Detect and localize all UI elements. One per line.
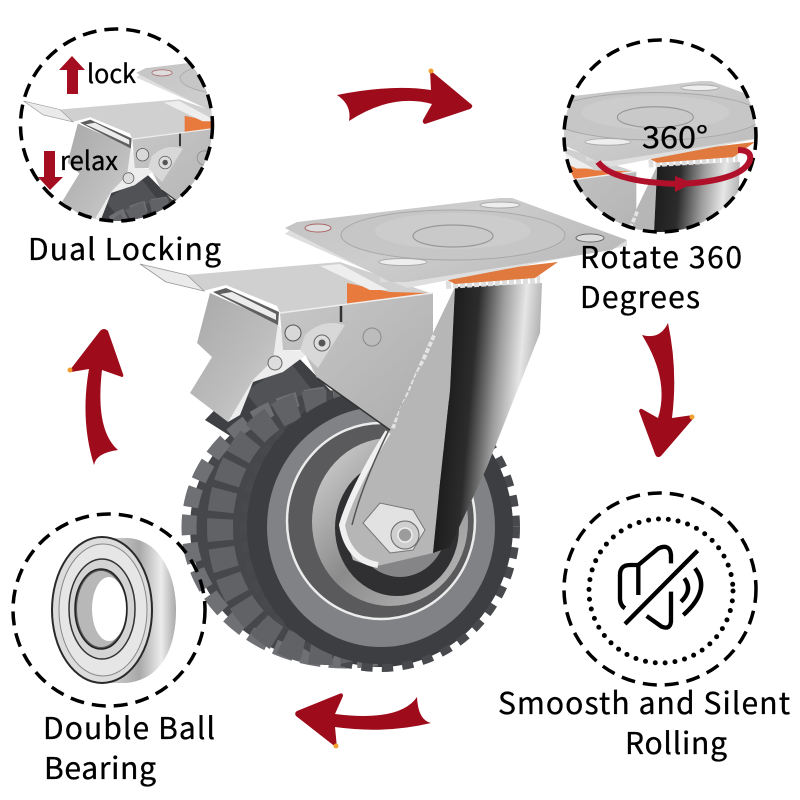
- fork: [340, 283, 542, 567]
- panel: double ball bearing: Bearing: [44, 744, 156, 788]
- zoomed lock detail: [24, 63, 212, 221]
- icon: muted speaker: [620, 547, 701, 628]
- tire: [189, 352, 513, 667]
- arrow: bottom, silent to bearing: [295, 693, 431, 748]
- arrow: right, rotate to silent: [639, 323, 694, 457]
- brake pedal: [190, 288, 310, 422]
- panel: double ball bearing: [13, 514, 215, 788]
- zoomed swivel detail: [564, 81, 756, 232]
- panel: silent rolling: [498, 493, 790, 763]
- lock label: lock: [87, 54, 137, 91]
- heading: Rotate 360: [580, 233, 742, 277]
- weld seam: [392, 335, 433, 428]
- axle nut: [363, 503, 425, 553]
- arrow: top, lock to rotate: [337, 68, 472, 124]
- icon: lock arrow: [59, 56, 85, 94]
- swivel top plate: [285, 198, 627, 288]
- icon: bearing: [52, 537, 176, 683]
- wheel face: [247, 390, 513, 664]
- brake bracket: [140, 262, 433, 430]
- heading: Smoosth and Silent: [498, 679, 790, 723]
- icon: rotation arrow: [598, 150, 750, 192]
- arrow: left, bearing to lock: [68, 329, 123, 465]
- relax label: relax: [60, 141, 118, 178]
- panel: silent rolling: Rolling: [625, 719, 727, 763]
- panel: rotate 360: [562, 38, 758, 316]
- 360 label: 360°: [642, 113, 708, 157]
- heading: Double Ball: [43, 704, 215, 748]
- heading: Dual Locking: [28, 225, 221, 269]
- panel: rotate 360: Degrees: [580, 273, 700, 317]
- main caster wheel: [140, 198, 627, 667]
- icon: relax arrow: [38, 151, 63, 190]
- panel: dual locking: [18, 27, 221, 268]
